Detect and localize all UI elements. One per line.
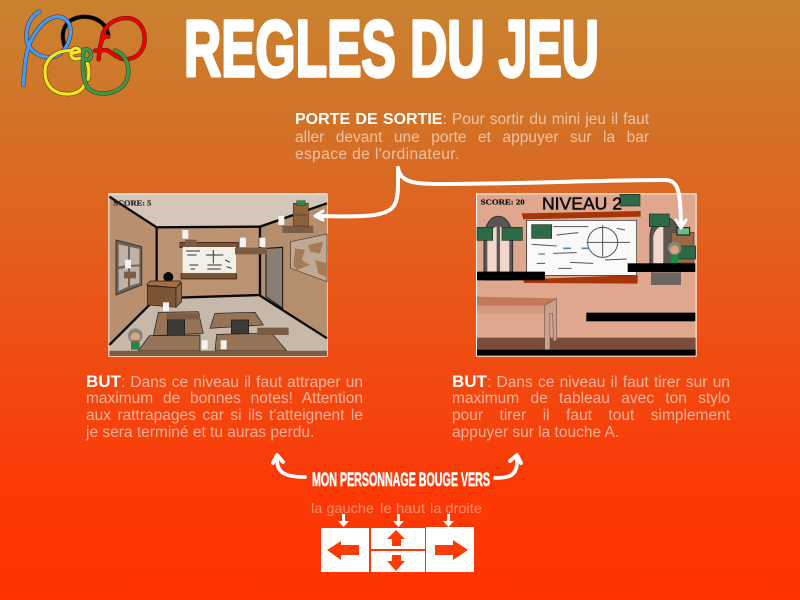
text block: level 1 goal: BUT: Dans ce niveau il faut attraper un: [86, 372, 363, 391]
screenshot: level 2: [476, 193, 697, 357]
platforms: [109, 226, 327, 356]
green blackboards: [477, 194, 696, 259]
text block: level 2 goal: maximum de tableau avec ton stylo: [452, 390, 730, 407]
direction labels: [311, 500, 482, 516]
character: [668, 242, 681, 263]
window: [116, 240, 142, 295]
text block: exit door: [295, 111, 649, 163]
direction labels: la gauche: [311, 500, 374, 516]
right arched window and door: [650, 217, 694, 285]
text block: exit door: espace de l'ordinateur.: [295, 146, 460, 163]
black platforms: [477, 263, 696, 356]
text block: level 1 goal: [86, 372, 363, 441]
whiteboard: [180, 242, 238, 279]
teacher desk: [147, 272, 182, 307]
score: SCORE: 20: [481, 198, 525, 207]
exit sign: [677, 228, 690, 235]
text block: level 2 goal: appuyer sur la touche A.: [452, 424, 619, 441]
text block: exit door: aller devant une porte et appuyer sur la bar: [295, 129, 649, 146]
student desks: [138, 312, 287, 351]
text block: level 2 goal: BUT: Dans ce niveau il faut tirer sur un: [452, 372, 730, 391]
arrow: curved left: [273, 455, 305, 477]
text block: exit door: PORTE DE SORTIE: Pour sortir du mini jeu il faut: [295, 111, 649, 128]
heading: character moves: MON PERSONNAGE BOUGE VERS: [312, 470, 490, 491]
door: [266, 247, 283, 308]
screenshot: level 1 classroom: [108, 193, 328, 357]
falling grades: [125, 216, 284, 349]
level heading: NIVEAU 2: [542, 193, 622, 213]
arrow: curved right: [495, 455, 521, 478]
arrow: exit text to both screenshots: [315, 168, 686, 228]
wall map: [291, 234, 327, 282]
text block: level 2 goal: pour tirer il faut tout simplement: [452, 407, 730, 424]
left arched window: [484, 216, 513, 280]
direction labels: le haut: [380, 500, 425, 516]
small pointers to keys: [338, 514, 454, 527]
text block: level 1 goal: je sera terminé et tu auras perdu.: [86, 424, 314, 441]
arrow keys: [321, 527, 474, 572]
exit door: [293, 201, 308, 226]
logo: olympic rings EPF: [23, 12, 145, 94]
table: [477, 297, 557, 350]
text block: level 1 goal: maximum de bonnes notes! Attention: [86, 390, 363, 407]
text block: level 1 goal: aux rattrapages car si ils t'atteignent le: [86, 407, 363, 424]
score: SCORE: 5: [113, 198, 152, 207]
character: [128, 328, 143, 350]
text block: level 2 goal: [452, 372, 730, 441]
whiteboard: [522, 211, 641, 284]
direction labels: la droite: [430, 500, 482, 516]
